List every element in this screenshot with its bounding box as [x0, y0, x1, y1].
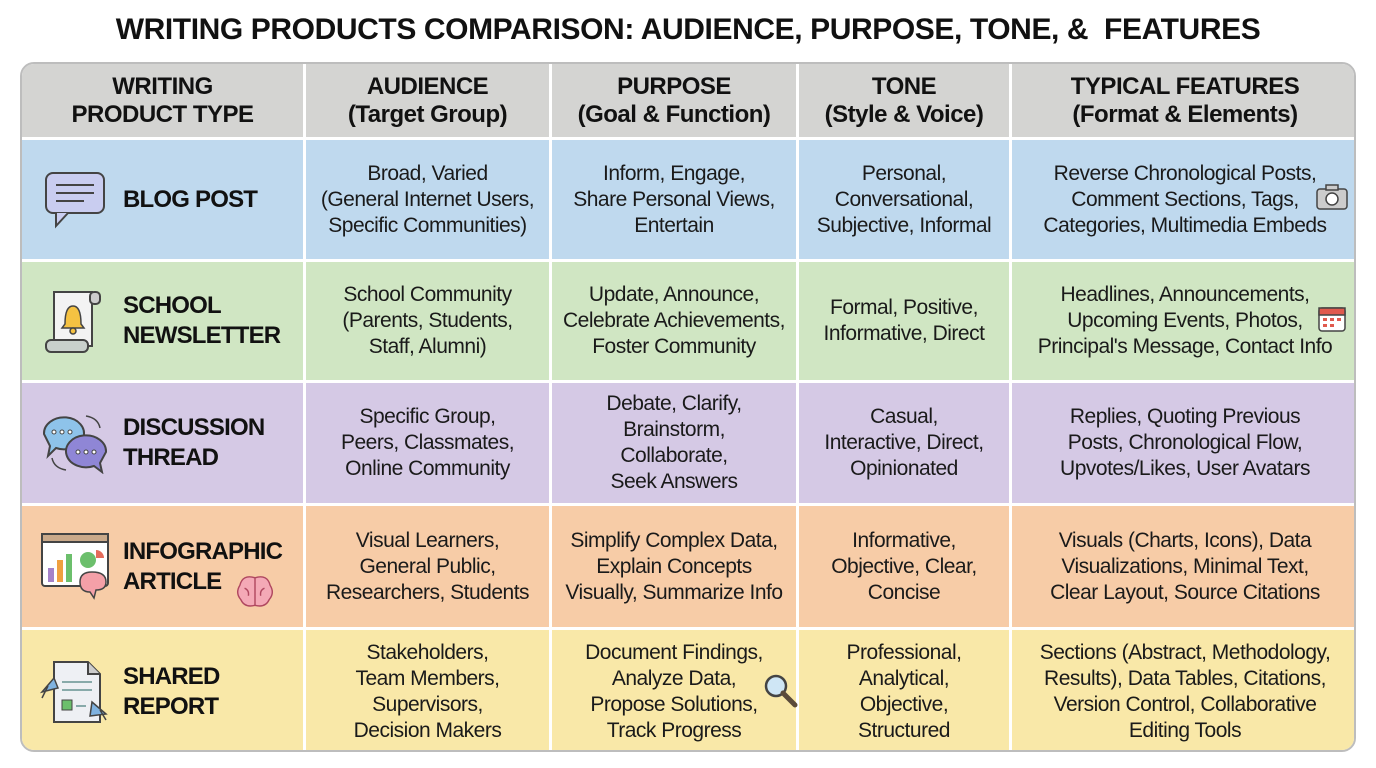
report: purpose: Analyze Data, [612, 667, 736, 690]
row label: shared report: REPORT [123, 693, 218, 720]
blog: purpose: Inform, Engage, [603, 162, 745, 184]
newsletter: audience [306, 262, 549, 380]
thread: purpose: Brainstorm, [623, 418, 725, 441]
icon: camera [1316, 184, 1348, 210]
newsletter: features: Principal's Message, Contact Info [1038, 335, 1332, 358]
report: features: Results), Data Tables, Citations, [1044, 667, 1326, 690]
row label: school newsletter: NEWSLETTER [123, 322, 280, 349]
icon: brain [237, 576, 273, 607]
infographic: features: Visualizations, Minimal Text, [1061, 554, 1309, 578]
row label: discussion thread [22, 383, 303, 503]
blog: features: Categories, Multimedia Embeds [1043, 214, 1327, 236]
report: features: Editing Tools [1129, 719, 1241, 742]
thread: purpose: Collaborate, [620, 444, 728, 467]
row label: infographic article: ARTICLE [123, 568, 221, 594]
newsletter: purpose: Foster Community [592, 335, 756, 358]
report: purpose: Propose Solutions, [590, 693, 758, 716]
thread: tone: Opinionated [850, 457, 958, 480]
header: purpose: PURPOSE [617, 72, 731, 100]
report: purpose: Document Findings, [585, 641, 763, 664]
header: writing product type: WRITING [112, 72, 213, 100]
blog: audience [306, 140, 549, 259]
report: audience: Team Members, [355, 667, 500, 690]
report: audience: Decision Makers [354, 719, 501, 742]
row label: discussion thread: THREAD [123, 444, 218, 471]
report: audience [306, 630, 549, 754]
newsletter: features: Headlines, Announcements, [1060, 283, 1310, 306]
report: tone: Analytical, [859, 667, 949, 690]
infographic: features [1012, 506, 1358, 627]
blog: audience: Broad, Varied [367, 162, 488, 184]
blog: tone: Personal, [862, 162, 946, 184]
header: audience: (Target Group) [348, 100, 507, 128]
report: tone: Objective, [860, 693, 948, 716]
row label: shared report: SHARED [123, 663, 220, 690]
thread: purpose: Debate, Clarify, [606, 392, 742, 415]
infographic: audience: Researchers, Students [326, 580, 529, 604]
report: purpose: Track Progress [607, 719, 741, 742]
report: audience: Stakeholders, [367, 641, 488, 664]
header: typical features: TYPICAL FEATURES [1071, 72, 1299, 100]
thread: tone: Casual, [870, 405, 938, 428]
newsletter: tone [799, 262, 1009, 380]
blog: features: Reverse Chronological Posts, [1054, 162, 1316, 184]
header: purpose [552, 64, 796, 137]
thread: purpose: Seek Answers [610, 470, 738, 493]
report: features [1012, 630, 1358, 754]
header: tone [799, 64, 1009, 137]
blog: tone [799, 140, 1009, 259]
newsletter: features: Upcoming Events, Photos, [1067, 309, 1303, 332]
header: audience [306, 64, 549, 137]
report: tone: Structured [858, 719, 950, 742]
infographic: purpose [552, 506, 796, 627]
report: audience: Supervisors, [372, 693, 483, 716]
infographic: tone [799, 506, 1009, 627]
infographic: purpose: Visually, Summarize Info [565, 580, 783, 604]
header: tone: (Style & Voice) [825, 100, 983, 128]
report: features: Version Control, Collaborative [1054, 693, 1316, 716]
row label: blog post [22, 140, 303, 259]
thread: tone [799, 383, 1009, 503]
infographic: tone: Objective, Clear, [831, 554, 977, 578]
row label: school newsletter: SCHOOL [123, 292, 221, 319]
row label: school newsletter [22, 262, 303, 380]
row label: blog post: BLOG POST [123, 186, 257, 212]
header: audience: AUDIENCE [367, 72, 488, 100]
thread: features [1012, 383, 1358, 503]
infographic: tone: Informative, [852, 528, 956, 552]
thread: tone: Interactive, Direct, [824, 431, 984, 454]
infographic: features: Clear Layout, Source Citations [1050, 580, 1320, 604]
newsletter: audience: (Parents, Students, [342, 309, 513, 332]
newsletter: audience: Staff, Alumni) [369, 335, 486, 358]
header: typical features: (Format & Elements) [1072, 100, 1298, 128]
blog: purpose: Entertain [634, 214, 714, 236]
header: writing product type [22, 64, 303, 137]
thread: audience: Peers, Classmates, [341, 431, 514, 454]
header: typical features [1012, 64, 1358, 137]
blog: features: Comment Sections, Tags, [1071, 188, 1299, 210]
newsletter: audience: School Community [343, 283, 512, 306]
infographic: audience [306, 506, 549, 627]
infographic: purpose: Simplify Complex Data, [570, 528, 778, 552]
blog: audience: (General Internet Users, [321, 188, 534, 210]
blog: purpose: Share Personal Views, [573, 188, 775, 210]
header: tone: TONE [872, 72, 936, 100]
newsletter: purpose: Celebrate Achievements, [563, 309, 785, 332]
header: purpose: (Goal & Function) [578, 100, 770, 128]
thread: features: Posts, Chronological Flow, [1068, 431, 1302, 454]
newsletter: purpose [552, 262, 796, 380]
infographic: features: Visuals (Charts, Icons), Data [1059, 528, 1311, 552]
report: features: Sections (Abstract, Methodology, [1040, 641, 1330, 664]
thread: features: Replies, Quoting Previous [1070, 405, 1300, 428]
header: writing product type: PRODUCT TYPE [71, 100, 254, 128]
icon: magnifier [764, 674, 798, 708]
report: purpose [552, 630, 796, 754]
thread: features: Upvotes/Likes, User Avatars [1060, 457, 1310, 480]
newsletter: tone: Formal, Positive, [830, 296, 978, 319]
newsletter: tone: Informative, Direct [824, 322, 984, 345]
row label: shared report [22, 630, 303, 754]
row label: infographic article: INFOGRAPHIC [123, 538, 282, 564]
thread: purpose [552, 383, 796, 503]
infographic: purpose: Explain Concepts [596, 554, 752, 578]
thread: audience [306, 383, 549, 503]
infographic: audience: General Public, [359, 554, 496, 578]
row label: discussion thread: DISCUSSION [123, 414, 264, 441]
report: tone [799, 630, 1009, 754]
newsletter: features [1012, 262, 1358, 380]
blog: audience: Specific Communities) [328, 214, 527, 236]
blog: features [1012, 140, 1358, 259]
icon: calendar [1318, 307, 1346, 332]
infographic: audience: Visual Learners, [356, 528, 499, 552]
newsletter: purpose: Update, Announce, [589, 283, 759, 306]
infographic: tone: Concise [868, 580, 940, 604]
thread: audience: Specific Group, [359, 405, 496, 428]
thread: audience: Online Community [345, 457, 510, 480]
report: tone: Professional, [847, 641, 961, 664]
row label: infographic article [22, 506, 303, 627]
blog: purpose [552, 140, 796, 259]
blog: tone: Conversational, [835, 188, 973, 210]
blog: tone: Subjective, Informal [817, 214, 991, 236]
title: WRITING PRODUCTS COMPARISON: AUDIENCE, PURPOSE, TONE, & FEATURES [116, 13, 1260, 46]
